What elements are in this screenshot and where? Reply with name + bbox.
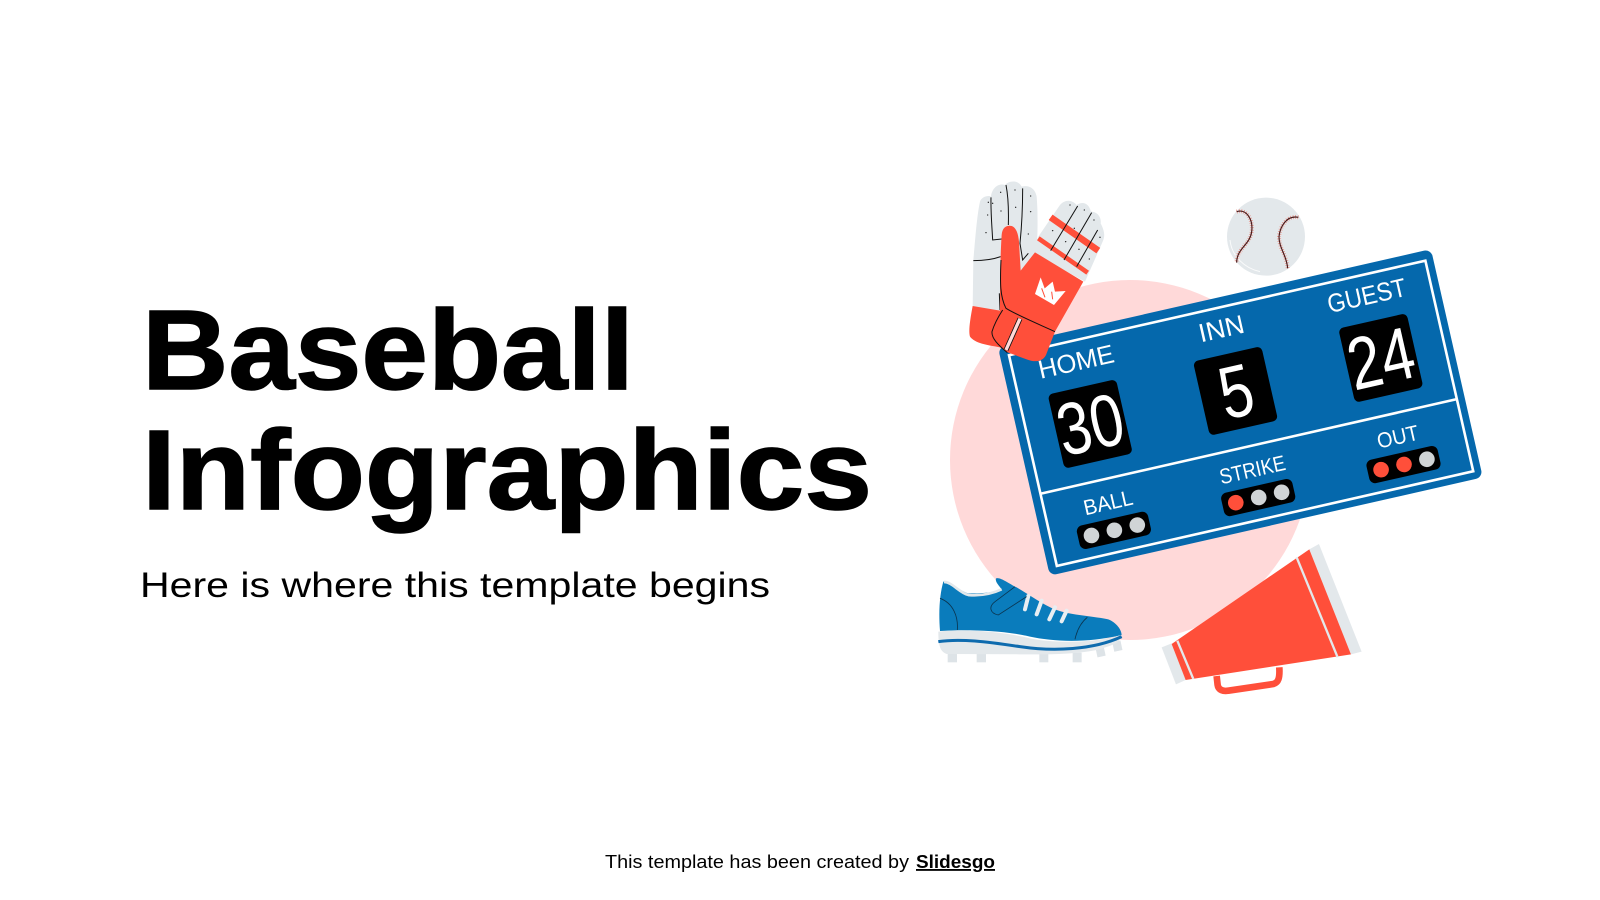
ball indicator: [1069, 483, 1152, 550]
out indicator: [1359, 417, 1442, 484]
credit line: Slidesgo: [916, 851, 995, 872]
title: [142, 287, 872, 533]
icon: baseball cleat: [938, 578, 1122, 662]
guest score: [1324, 272, 1429, 408]
scoreboard: [998, 249, 1483, 576]
guest score: 24: [1340, 311, 1422, 406]
inning: [1184, 306, 1279, 440]
out indicator: OUT: [1375, 421, 1421, 454]
home score: 30: [1049, 377, 1132, 472]
inning: 5: [1211, 347, 1261, 435]
icon: baseball: [1227, 198, 1305, 276]
inning: INN: [1196, 309, 1247, 348]
home score: [1035, 338, 1137, 473]
strike indicator: [1214, 450, 1296, 517]
title: Baseball: [142, 287, 634, 413]
icon: megaphone: [1162, 544, 1362, 691]
credit line: This template has been created by: [605, 851, 910, 872]
ball indicator: BALL: [1081, 486, 1135, 520]
pink background circle: [950, 280, 1310, 640]
home score: HOME: [1035, 338, 1117, 385]
icon: batting glove: [969, 181, 1104, 361]
strike indicator: STRIKE: [1217, 451, 1288, 489]
title: Infographics: [142, 407, 872, 533]
subtitle: Here is where this template begins: [140, 566, 770, 605]
guest score: GUEST: [1324, 272, 1409, 319]
